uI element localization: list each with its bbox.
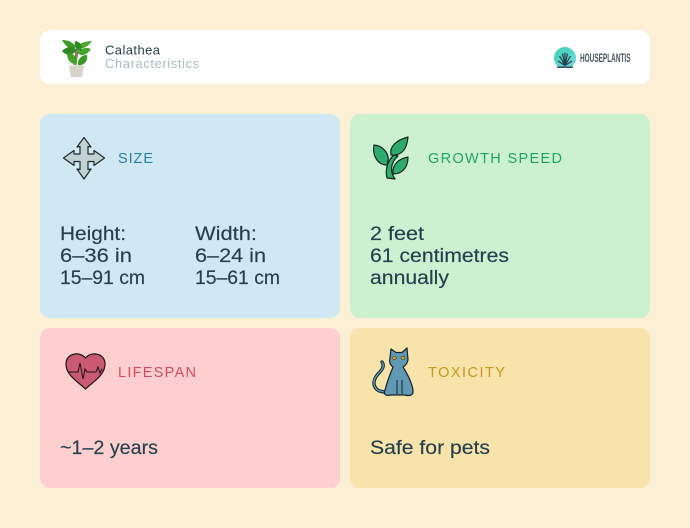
logo: Houseplantis [554, 47, 630, 67]
icon: potted plant [62, 40, 92, 77]
icon: heart with pulse [66, 354, 105, 389]
subtitle: Characteristics [105, 56, 200, 71]
text: width: Width: [195, 224, 257, 245]
text: height [60, 224, 145, 289]
text: height: 6–36 in [60, 246, 132, 267]
panel: growth speed [350, 114, 650, 318]
text: growth value: 61 centimetres [370, 246, 509, 267]
text: growth value: annually [370, 268, 449, 289]
icon: cat [374, 348, 413, 396]
heading: growth speed: GROWTH SPEED [428, 151, 562, 167]
text: height: Height: [60, 224, 126, 245]
title: Calathea [105, 42, 161, 58]
text: toxicity value: Safe for pets [370, 438, 490, 459]
text: growth value [370, 224, 509, 289]
text: width: 15–61 cm [195, 268, 280, 289]
panel: lifespan [40, 328, 340, 488]
heading: lifespan: LIFESPAN [118, 365, 196, 381]
text: width [195, 224, 280, 289]
text: growth value: 2 feet [370, 224, 425, 245]
heading: toxicity: TOXICITY [428, 365, 505, 381]
icon: four-way arrows [64, 138, 104, 179]
panel: size [40, 114, 340, 318]
heading: size: SIZE [118, 151, 153, 167]
text: width: 6–24 in [195, 246, 266, 267]
icon: leaves [374, 137, 408, 179]
panel: toxicity [350, 328, 650, 488]
header bar [40, 30, 650, 84]
text: lifespan value: ~1–2 years [60, 438, 158, 459]
logo: Houseplantis: HOUSEPLANTIS [580, 51, 630, 65]
text: height: 15–91 cm [60, 268, 145, 289]
